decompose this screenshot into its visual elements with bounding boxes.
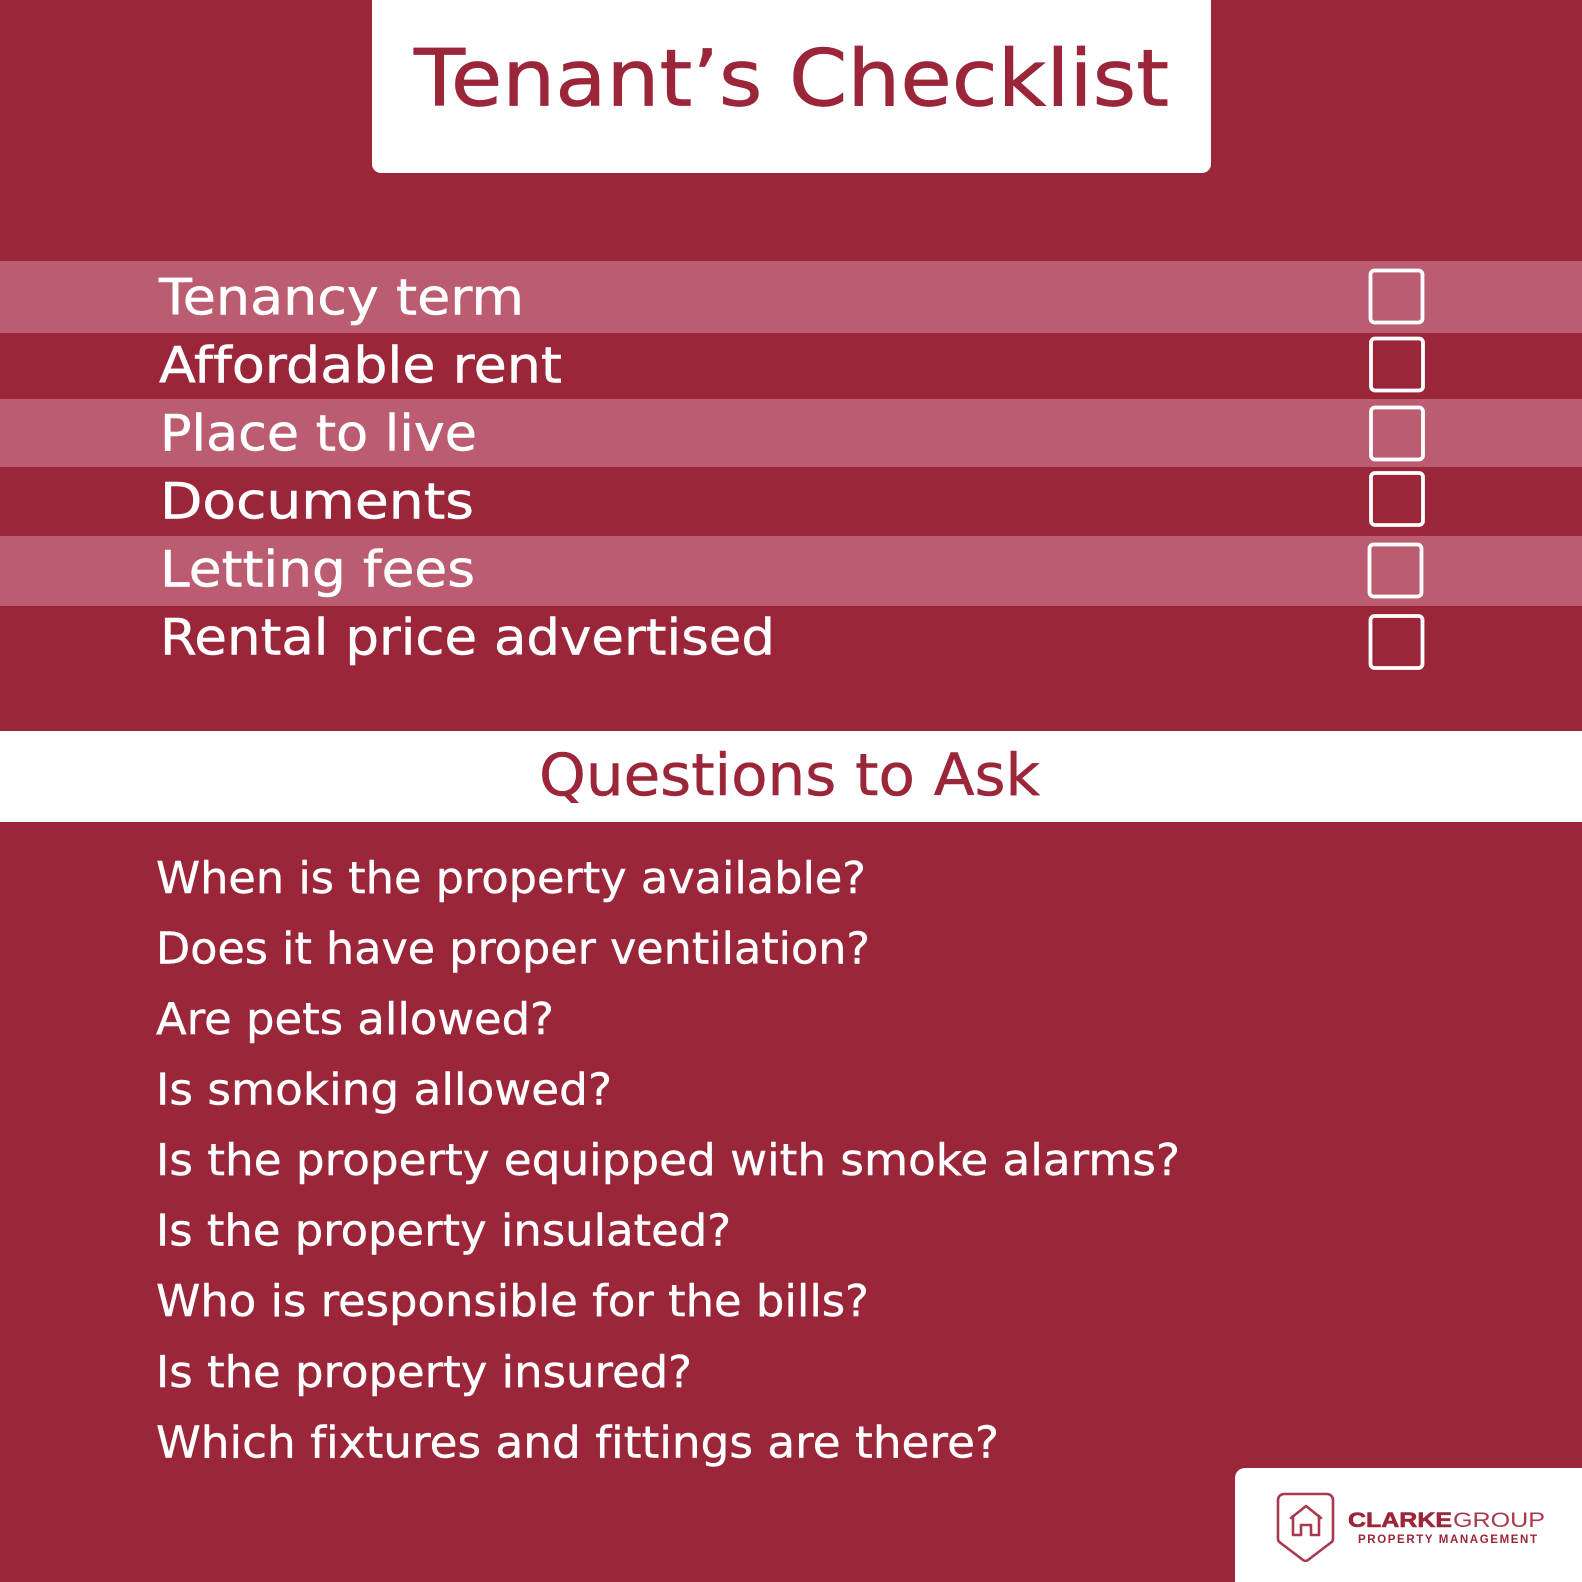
title panel bbox=[372, 0, 1211, 173]
question 4: Is smoking allowed? bbox=[156, 1064, 612, 1116]
question 5: Is the property equipped with smoke alarms? bbox=[156, 1135, 1180, 1186]
question 1: When is the property available? bbox=[156, 853, 866, 904]
question 9: Which fixtures and fittings are there? bbox=[156, 1418, 999, 1468]
title: Tenant’s Checklist bbox=[413, 34, 1169, 124]
checklist item: Rental price advertised: Rental price advertised bbox=[160, 608, 775, 666]
panel: questions list bbox=[156, 853, 1180, 1468]
checklist item: Tenancy term bbox=[158, 268, 1423, 326]
logo tagline: PROPERTY MANAGEMENT bbox=[1358, 1534, 1537, 1546]
question 3: Are pets allowed? bbox=[156, 994, 554, 1045]
logo panel bbox=[1235, 1468, 1582, 1582]
question 8: Is the property insured? bbox=[156, 1347, 692, 1398]
checklist item: Place to live bbox=[160, 404, 1423, 462]
question 7: Who is responsible for the bills? bbox=[156, 1276, 869, 1327]
question 2: Does it have proper ventilation? bbox=[156, 924, 870, 974]
checklist item: Affordable rent: Affordable rent bbox=[159, 336, 562, 394]
checklist item: Rental price advertised bbox=[160, 608, 1422, 668]
checklist item: Documents: Documents bbox=[160, 472, 474, 530]
panel: checklist bbox=[0, 261, 1582, 668]
checklist item: Letting fees: Letting fees bbox=[160, 540, 475, 598]
question 6: Is the property insulated? bbox=[156, 1206, 731, 1256]
checklist item: Affordable rent bbox=[159, 336, 1423, 394]
panel: questions heading band bbox=[0, 731, 1582, 822]
checklist item: Documents bbox=[160, 472, 1423, 530]
logo wordmark: clarke: CLARKE bbox=[1348, 1509, 1452, 1532]
heading: Questions to Ask: Questions to Ask bbox=[539, 741, 1040, 809]
checklist item: Letting fees bbox=[160, 540, 1422, 598]
checklist item: Tenancy term: Tenancy term bbox=[158, 268, 524, 326]
icon: house shield bbox=[1278, 1494, 1333, 1561]
checklist item: Place to live: Place to live bbox=[160, 404, 477, 462]
logo wordmark: group: GROUP bbox=[1453, 1509, 1545, 1532]
